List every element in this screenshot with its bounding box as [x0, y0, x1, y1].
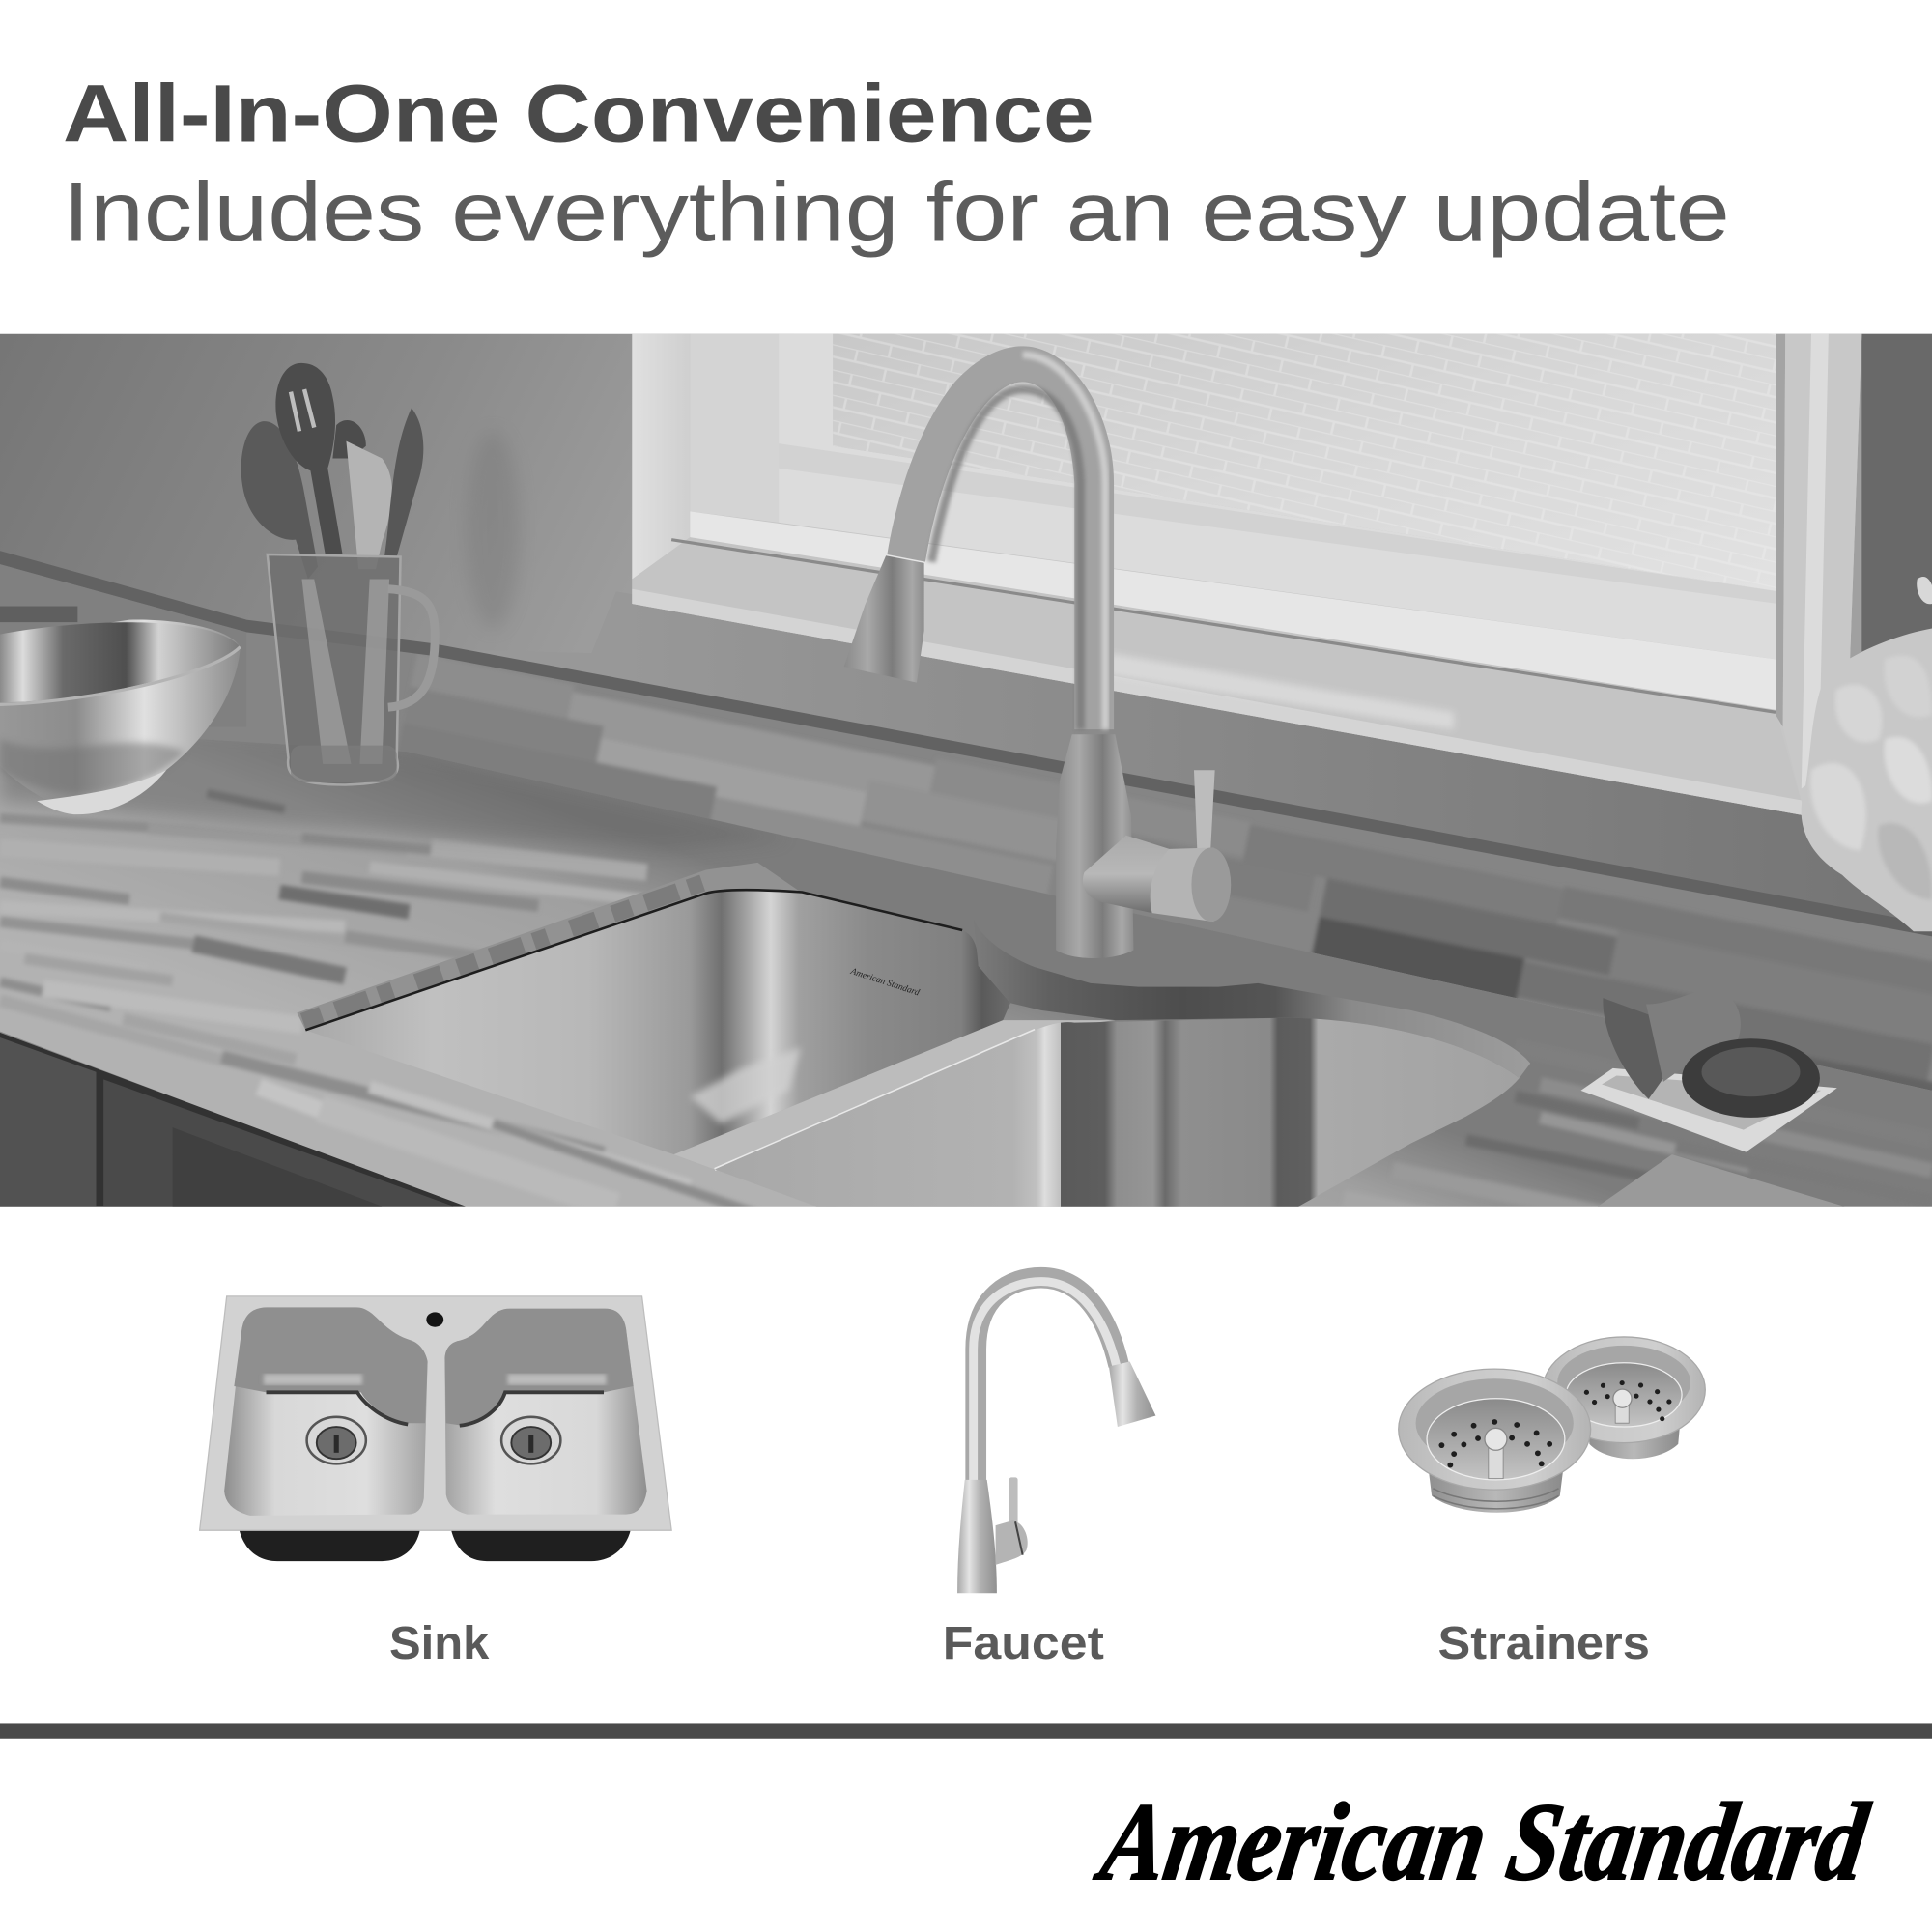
bristles — [1603, 998, 1663, 1099]
base cabinets — [0, 1033, 466, 1207]
label: Sink: Sink — [389, 1617, 489, 1669]
right basin — [444, 1309, 647, 1515]
large wooden spoon — [242, 421, 316, 554]
towel — [1578, 1154, 1889, 1220]
left sink wood cut edge — [297, 863, 801, 1030]
wood rim around right bowl — [977, 946, 1530, 1078]
sink flange — [200, 1296, 671, 1530]
product: strainers — [1399, 1337, 1705, 1513]
body — [1056, 734, 1133, 958]
spout — [887, 346, 1114, 729]
utensils in measuring jug — [242, 363, 435, 784]
rear strainer — [1543, 1337, 1705, 1459]
slotted spoon — [275, 363, 343, 554]
spatula — [346, 441, 392, 569]
wood backsplash — [0, 551, 1932, 1129]
faucet hole — [426, 1312, 443, 1327]
kitchen photo — [0, 334, 1932, 1238]
title: Includes everything for an easy update — [63, 165, 1730, 259]
left sink bowl — [305, 890, 1010, 1154]
black basin undersides — [239, 1529, 631, 1561]
lever — [1194, 770, 1215, 862]
product: faucet — [957, 1278, 1155, 1593]
left basin — [224, 1307, 428, 1516]
divider bar — [0, 1723, 1932, 1739]
narrow spoon — [384, 408, 423, 557]
wall — [0, 334, 1932, 1207]
label: Strainers: Strainers — [1438, 1617, 1650, 1669]
spray head — [844, 555, 924, 683]
wood handle — [1646, 988, 1741, 1082]
title — [63, 69, 1730, 259]
brush, steel wool and soap tray — [1580, 988, 1837, 1152]
steel wool — [1682, 1038, 1820, 1118]
flowers — [1802, 577, 1932, 931]
hub — [1083, 836, 1169, 913]
window — [632, 334, 1861, 815]
back spoon — [332, 420, 366, 458]
right sink bowl — [715, 1018, 1520, 1217]
glass jug body — [268, 554, 401, 784]
product: sink — [200, 1296, 671, 1561]
front strainer — [1399, 1369, 1591, 1513]
title: All-In-One Convenience — [63, 69, 1094, 159]
faucet in photo — [844, 346, 1231, 958]
butcher block countertop — [0, 727, 1932, 1238]
mixing bowl — [0, 619, 241, 814]
sink divider — [674, 1020, 1115, 1169]
label: Faucet: Faucet — [943, 1617, 1104, 1669]
sink maker mark: American Standard — [848, 966, 921, 998]
